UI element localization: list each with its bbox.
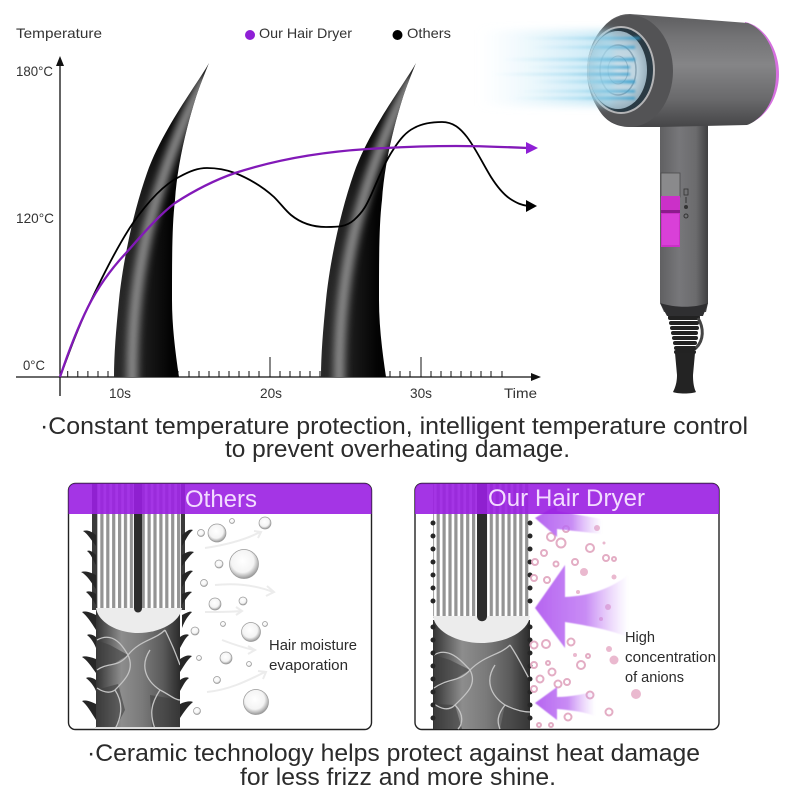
switch window bbox=[661, 173, 680, 197]
caption: ceramic technology bbox=[87, 740, 700, 791]
x axis labels: 30s bbox=[410, 385, 432, 401]
panel: our hair dryer bbox=[415, 484, 719, 730]
cord plug bbox=[673, 353, 696, 394]
label: high concentration of anions bbox=[625, 630, 716, 686]
smooth cuticle edge bbox=[430, 520, 532, 720]
label: high concentration of anions: of anions bbox=[625, 670, 684, 686]
y axis labels: 180°C bbox=[16, 63, 53, 79]
label: hair moisture evaporation: evaporation bbox=[269, 658, 348, 674]
cuticle scales bbox=[81, 530, 194, 720]
curve: others bbox=[60, 122, 537, 377]
panel: others bbox=[68, 484, 372, 730]
panel header: ours bbox=[415, 484, 719, 514]
front face grille bbox=[587, 26, 655, 114]
hair strand 1 bbox=[114, 63, 209, 385]
dryer collar bbox=[660, 303, 708, 316]
panel frame bbox=[415, 484, 719, 730]
caption: ceramic technology: for less frizz and more shine. bbox=[240, 764, 556, 791]
y axis labels bbox=[16, 63, 54, 373]
x axis labels bbox=[109, 385, 537, 401]
caption: ceramic technology: ·Ceramic technology helps protect against heat damage bbox=[87, 740, 700, 767]
panel header: ours: Our Hair Dryer bbox=[488, 485, 645, 512]
arrow: middle bbox=[535, 565, 628, 648]
panel header: others bbox=[68, 484, 372, 514]
switch icons bbox=[684, 189, 688, 218]
x axis labels: Time bbox=[504, 385, 537, 401]
front face ring bbox=[587, 15, 673, 127]
anion dots bbox=[573, 525, 641, 699]
y axis labels: 0°C bbox=[23, 357, 45, 373]
soft air glow bbox=[478, 30, 613, 106]
arrow: top bbox=[535, 505, 602, 537]
caption: temperature control: to prevent overheating damage. bbox=[225, 436, 570, 463]
caption: temperature control bbox=[40, 413, 748, 463]
pink rim bbox=[745, 22, 779, 125]
x axis labels: 20s bbox=[260, 385, 282, 401]
evaporation arrows bbox=[205, 531, 274, 692]
axes with ticks bbox=[16, 56, 541, 396]
pink slider switch bbox=[661, 196, 680, 247]
water bubbles bbox=[191, 517, 271, 714]
chart: temperature over time bbox=[16, 25, 541, 401]
hair dryer illustration bbox=[478, 14, 779, 394]
blue air streaks bbox=[490, 37, 640, 100]
arrow: bottom bbox=[535, 687, 595, 720]
label: hair moisture evaporation: Hair moisture bbox=[269, 638, 357, 654]
label: high concentration of anions: High bbox=[625, 630, 655, 646]
dryer handle bbox=[660, 118, 708, 312]
caption: temperature control: ·Constant temperature protection, intelligent temperature control bbox=[40, 413, 748, 440]
legend: our hair dryer: Our Hair Dryer bbox=[259, 25, 352, 41]
y axis labels: 120°C bbox=[16, 210, 54, 226]
legend: others: Others bbox=[407, 25, 451, 41]
label: high concentration of anions: concentration bbox=[625, 650, 716, 666]
power cord spring bbox=[668, 315, 702, 354]
hair cross-section: others bbox=[92, 484, 185, 729]
hair cross-section: ours bbox=[433, 484, 530, 729]
x axis labels: 10s bbox=[109, 385, 131, 401]
panel frame bbox=[68, 484, 372, 730]
panel header: others: Others bbox=[185, 486, 257, 513]
label: hair moisture evaporation bbox=[269, 638, 357, 674]
y axis title: Temperature bbox=[16, 25, 102, 41]
anion particles bbox=[530, 526, 616, 727]
dryer barrel bbox=[590, 14, 776, 127]
hair strand 2 bbox=[321, 63, 416, 385]
curve: our hair dryer bbox=[60, 142, 538, 377]
